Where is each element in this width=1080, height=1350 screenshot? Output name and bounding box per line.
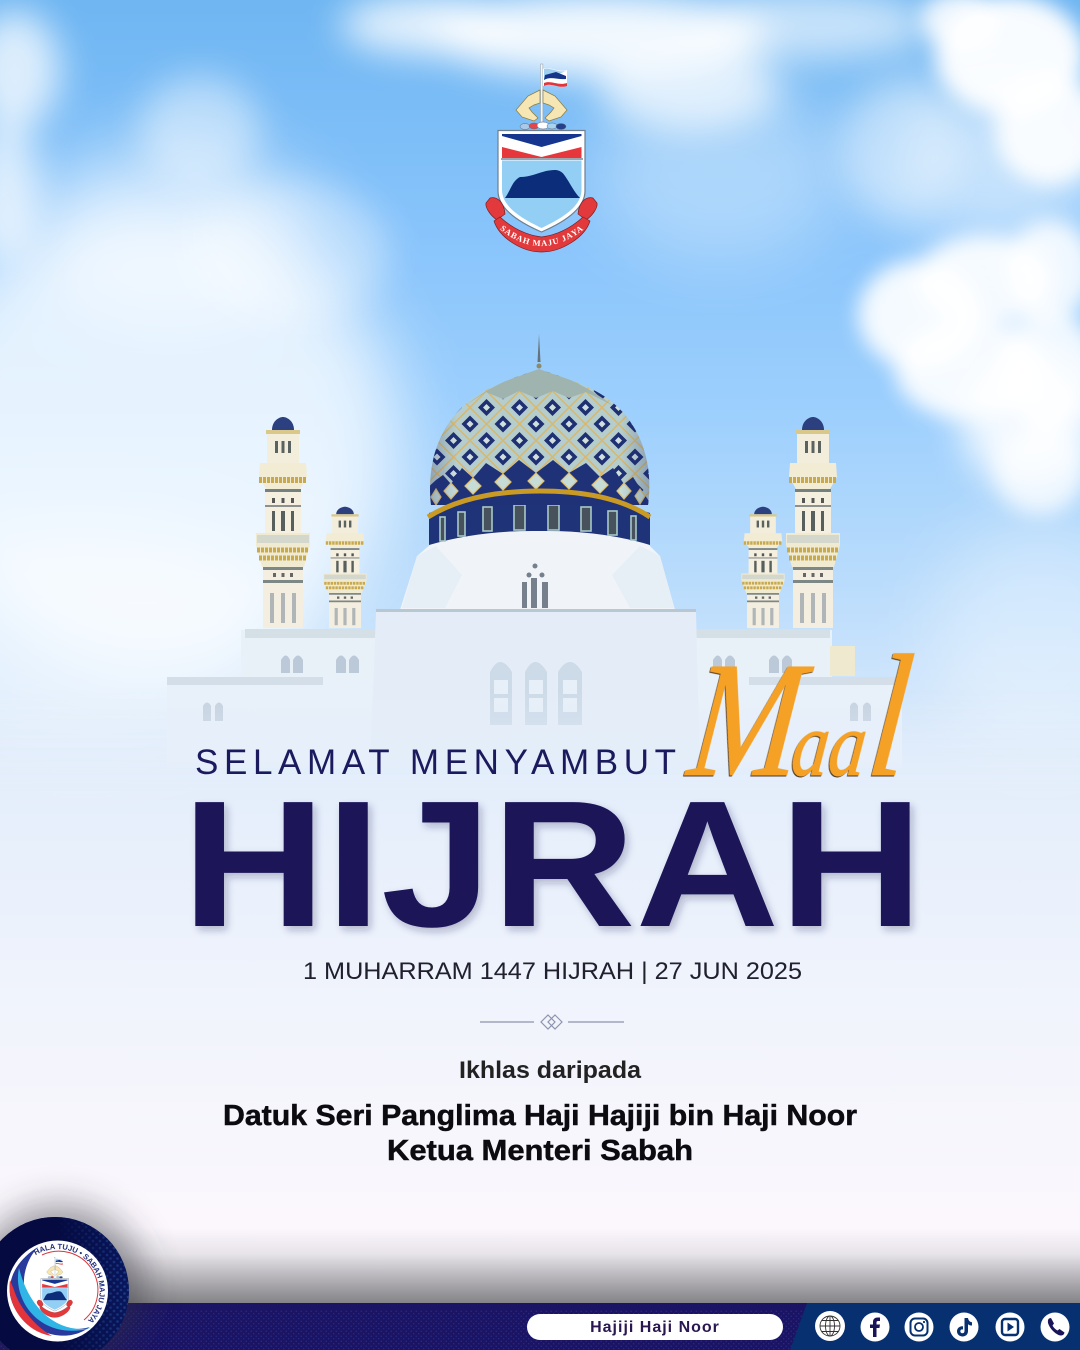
date line: 1 MUHARRAM 1447 HIJRAH | 27 JUN 2025 [303, 958, 802, 985]
social icons [815, 1311, 1070, 1342]
clouds [0, 0, 1080, 760]
footer bar [0, 1303, 1080, 1350]
arms holding pole [516, 90, 567, 121]
icon: facebook [860, 1312, 890, 1342]
minaret: right short [741, 507, 785, 628]
name pill: Hajiji Haji Noor [590, 1319, 720, 1336]
minaret: left short [323, 507, 367, 628]
text: Ikhlas daripada: Ikhlas daripada [459, 1057, 642, 1084]
script heading: Maal: Maal [680, 620, 921, 814]
dome drum with windows [429, 496, 650, 545]
wreath gems [520, 122, 566, 130]
left lower wing [167, 677, 374, 768]
conical dome base [400, 530, 675, 610]
minaret: far left tall [256, 417, 310, 628]
footer shadow gradient [0, 1228, 1080, 1303]
patterned dome [430, 369, 650, 505]
icon: instagram [904, 1312, 934, 1342]
name pill [527, 1314, 783, 1340]
icon: Sabah state crest [486, 64, 597, 252]
badge swooshes [9, 1247, 92, 1336]
icon: phone [1040, 1312, 1070, 1342]
ribbon [486, 198, 597, 252]
crest motto: SABAH MAJU JAYA [500, 226, 584, 246]
mist over lower mosque [0, 690, 1080, 791]
sender name and title: Datuk Seri Panglima Haji Hajiji bin Haji Noor [223, 1100, 857, 1132]
ornament divider [480, 1015, 624, 1029]
heading line: SELAMAT MENYAMBUT: SELAMAT MENYAMBUT [195, 743, 676, 782]
main title: HIJRAH: HIJRAH [182, 764, 923, 965]
badge crest [37, 1257, 73, 1317]
icon: globe [815, 1311, 845, 1341]
left upper wing [241, 629, 376, 690]
main hall block [370, 609, 700, 768]
icon: tiktok [950, 1312, 978, 1342]
badge shadow [0, 1205, 145, 1350]
sender name and title [223, 1100, 857, 1167]
right upper wing [696, 629, 855, 690]
spire [536, 334, 542, 368]
badge slogan: HALA TUJU • SABAH MAJU JAYA [34, 1244, 105, 1322]
minaret: right tall [786, 417, 840, 628]
circular badge [0, 1217, 129, 1350]
mosque illustration [167, 334, 902, 768]
right lower wing [696, 677, 902, 768]
gold ring [428, 491, 650, 517]
sender name and title: Ketua Menteri Sabah [387, 1135, 693, 1167]
badge red arc [42, 1251, 98, 1320]
shield [498, 130, 585, 232]
flag and pole [540, 64, 567, 122]
icon: video play [996, 1312, 1024, 1342]
